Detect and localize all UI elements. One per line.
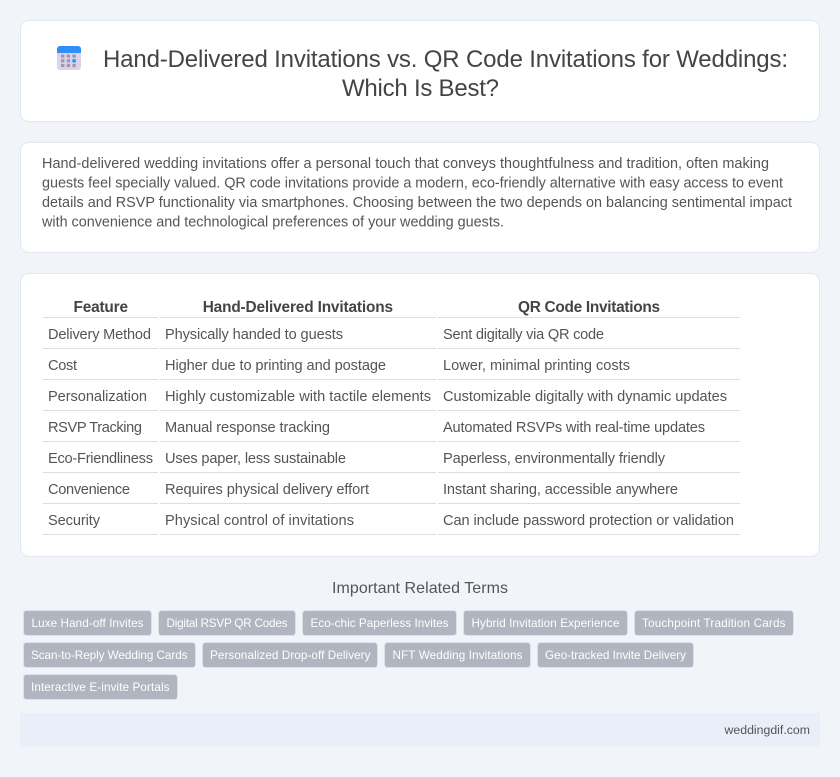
- table row: convenience: Instant sharing, accessible anywhere: [443, 482, 678, 498]
- table row: cost: Lower, minimal printing costs: [443, 358, 630, 374]
- table row: convenience: Requires physical delivery effort: [165, 482, 369, 498]
- tag: [384, 642, 530, 668]
- tag: [464, 610, 628, 636]
- text block: description: Hand-delivered wedding invitations offer a personal touch that conveys thoughtfulness and tradition, often making: [42, 156, 769, 172]
- table header: [74, 299, 660, 316]
- tag: Hybrid Invitation Experience: [472, 617, 620, 630]
- title: [103, 46, 788, 102]
- title: Hand-Delivered Invitations vs. QR Code Invitations for Weddings:: [103, 46, 788, 73]
- table row: eco-friendliness: Eco-Friendliness: [48, 451, 153, 467]
- table row: cost: [48, 358, 630, 374]
- table row: security: Can include password protection or validation: [443, 513, 734, 529]
- table row: eco-friendliness: [48, 451, 666, 467]
- table row: security: [48, 513, 734, 529]
- footer: [20, 713, 820, 747]
- tag: Interactive E-invite Portals: [31, 681, 170, 694]
- table header: Feature: [74, 299, 128, 316]
- table row: eco-friendliness: Paperless, environmentally friendly: [443, 451, 666, 467]
- table row: personalization: Customizable digitally with dynamic updates: [443, 389, 727, 405]
- table row: RSVP tracking: Automated RSVPs with real-time updates: [443, 420, 705, 436]
- tag: [634, 610, 794, 636]
- icon: calendar: [57, 46, 81, 70]
- table row: convenience: [48, 482, 678, 498]
- tag: [24, 674, 178, 700]
- heading: important related terms: Important Related Terms: [332, 580, 508, 597]
- table row: RSVP tracking: RSVP Tracking: [48, 420, 142, 436]
- panel: title card: [20, 20, 820, 122]
- table row: convenience: Convenience: [48, 482, 130, 498]
- table header: QR Code Invitations: [518, 299, 660, 316]
- table row: delivery method: [48, 327, 604, 343]
- table row: delivery method: Physically handed to guests: [165, 327, 343, 343]
- tag: [24, 642, 196, 668]
- tag: NFT Wedding Invitations: [392, 649, 523, 662]
- table row: personalization: Personalization: [48, 389, 147, 405]
- table row: personalization: [48, 389, 727, 405]
- tag: Personalized Drop-off Delivery: [210, 649, 371, 662]
- tag: [538, 642, 694, 668]
- table row: eco-friendliness: Uses paper, less sustainable: [165, 451, 346, 467]
- table row: delivery method: Sent digitally via QR code: [443, 327, 604, 343]
- table row: personalization: Highly customizable with tactile elements: [165, 389, 431, 405]
- panel: description card: [20, 142, 820, 252]
- text block: description: with convenience and technological preferences of your wedding guests.: [41, 214, 504, 230]
- text block: description: guests feel specially valued. QR code invitations provide a modern, eco-friendly alternative with easy access to event: [42, 176, 783, 192]
- tag: Touchpoint Tradition Cards: [642, 617, 786, 630]
- tag list: related terms: [24, 610, 794, 700]
- table row: cost: Cost: [48, 358, 77, 374]
- tag: Luxe Hand-off Invites: [32, 617, 144, 630]
- tag: Digital RSVP QR Codes: [166, 617, 288, 630]
- table row: security: Security: [48, 513, 101, 529]
- table row: RSVP tracking: [48, 420, 705, 436]
- tag: [202, 642, 378, 668]
- panel: comparison table card: [20, 274, 820, 556]
- title: Which Is Best?: [342, 75, 499, 102]
- tag: [302, 610, 456, 636]
- footer: weddingdif.com: [724, 723, 810, 737]
- table row: cost: Higher due to printing and postage: [165, 358, 386, 374]
- table row: RSVP tracking: Manual response tracking: [165, 420, 330, 436]
- tag: [158, 610, 296, 636]
- table row: delivery method: Delivery Method: [48, 327, 151, 343]
- tag: [24, 610, 152, 636]
- tag: Scan-to-Reply Wedding Cards: [31, 649, 188, 662]
- tag: Eco-chic Paperless Invites: [310, 617, 449, 630]
- text block: description: details and RSVP functionality via smartphones. Choosing between the two depends on balancing sentimental impact: [42, 195, 792, 211]
- tag: Geo-tracked Invite Delivery: [545, 649, 686, 662]
- table row: security: Physical control of invitations: [165, 513, 354, 529]
- table header: Hand-Delivered Invitations: [203, 299, 393, 316]
- text block: description: [41, 156, 792, 230]
